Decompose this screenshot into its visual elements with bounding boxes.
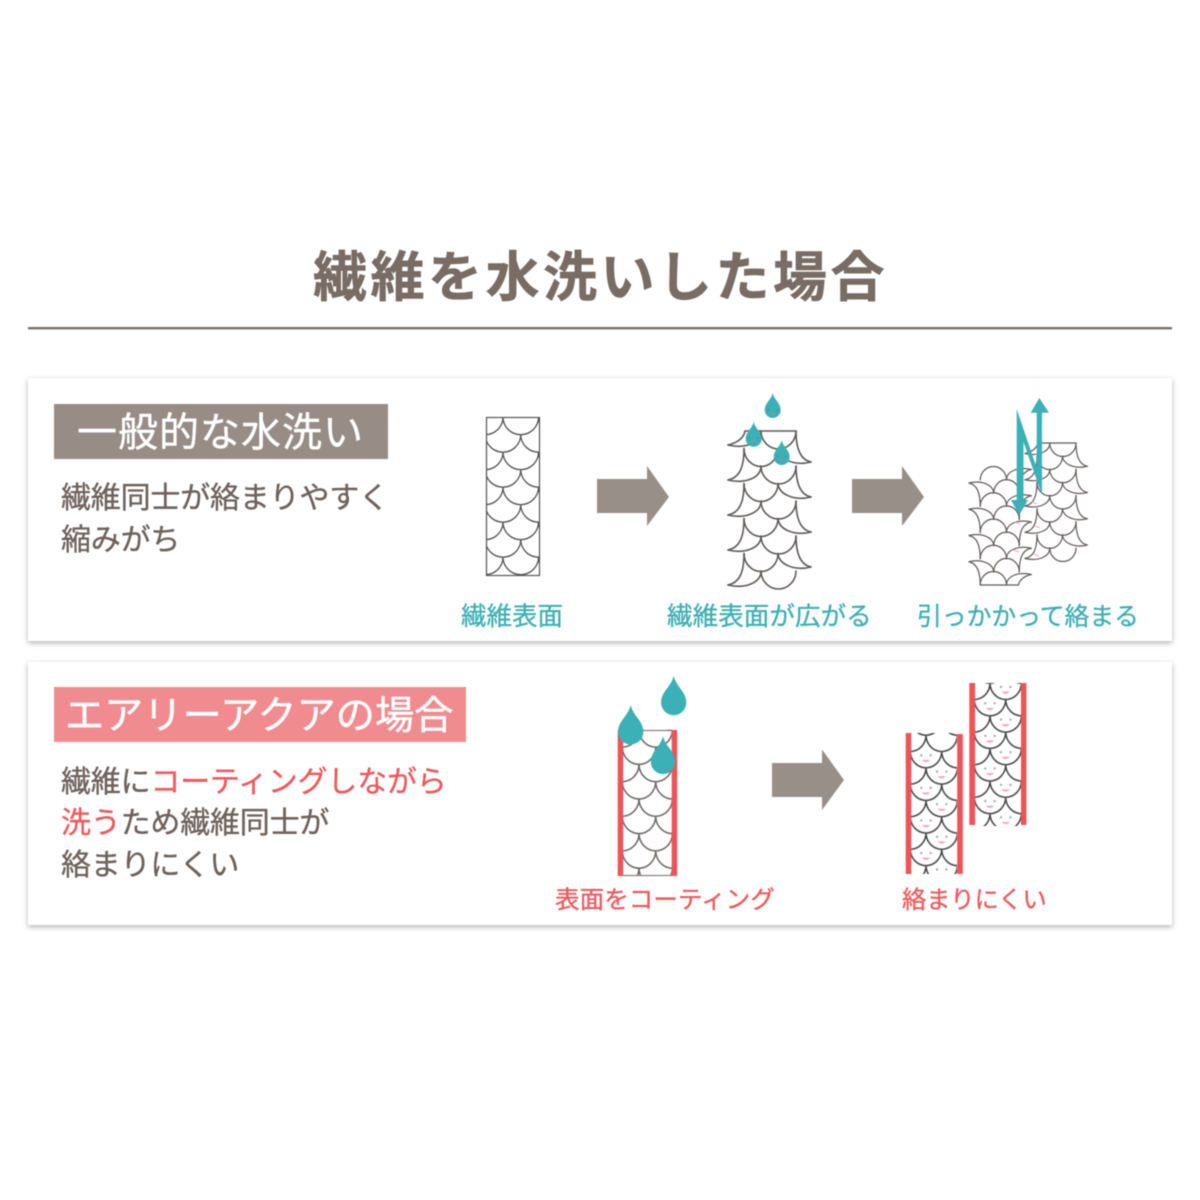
arrow [852, 466, 924, 526]
text block: general wash description: 繊維同士が絡まりやすく [61, 482, 389, 515]
diagram: fiber surface [486, 417, 540, 576]
text block: Airy Aqua description: コーティングしながら [150, 766, 447, 799]
text block: Airy Aqua description: 洗う [61, 807, 121, 840]
arrow [597, 466, 669, 526]
caption: hard to tangle: 絡まりにくい [902, 887, 1047, 914]
arrow [772, 750, 844, 810]
text block: Airy Aqua description: 繊維に [61, 766, 150, 799]
icon: water drop [774, 440, 790, 465]
icon: water drop [765, 393, 781, 418]
text block: Airy Aqua description: 絡まりにくい [61, 849, 239, 882]
icon: water drop [651, 736, 675, 774]
diagram: coated fibers do not tangle [906, 683, 1026, 874]
diagram: fibers catch and tangle [969, 398, 1087, 585]
caption: surface spreads: 繊維表面が広がる [667, 602, 872, 631]
text block: Airy Aqua description: ため繊維同士が [121, 807, 329, 840]
heading: general water wash: 一般的な水洗い [77, 411, 364, 455]
diagram: coated fiber with drops [618, 676, 686, 876]
diagram: fiber surface spreads with drops [728, 393, 811, 589]
icon: zigzag arrows [1011, 398, 1049, 515]
title: 繊維を水洗いした場合 [313, 248, 888, 308]
icon: water drop [746, 422, 762, 447]
caption: surface coating: 表面をコーティング [555, 886, 775, 914]
text block: general wash description: 縮みがち [61, 524, 180, 557]
heading: Airy Aqua: エアリーアクアの場合 [65, 695, 453, 738]
heading: general water wash [54, 404, 388, 459]
caption: catches and tangles: 引っかかって絡まる [917, 603, 1139, 631]
icon: water drop [618, 705, 643, 744]
panel: general water wash [28, 378, 1172, 641]
caption: fiber surface: 繊維表面 [461, 603, 563, 631]
panel: Airy Aqua [28, 662, 1172, 925]
icon: water drop [661, 676, 686, 715]
